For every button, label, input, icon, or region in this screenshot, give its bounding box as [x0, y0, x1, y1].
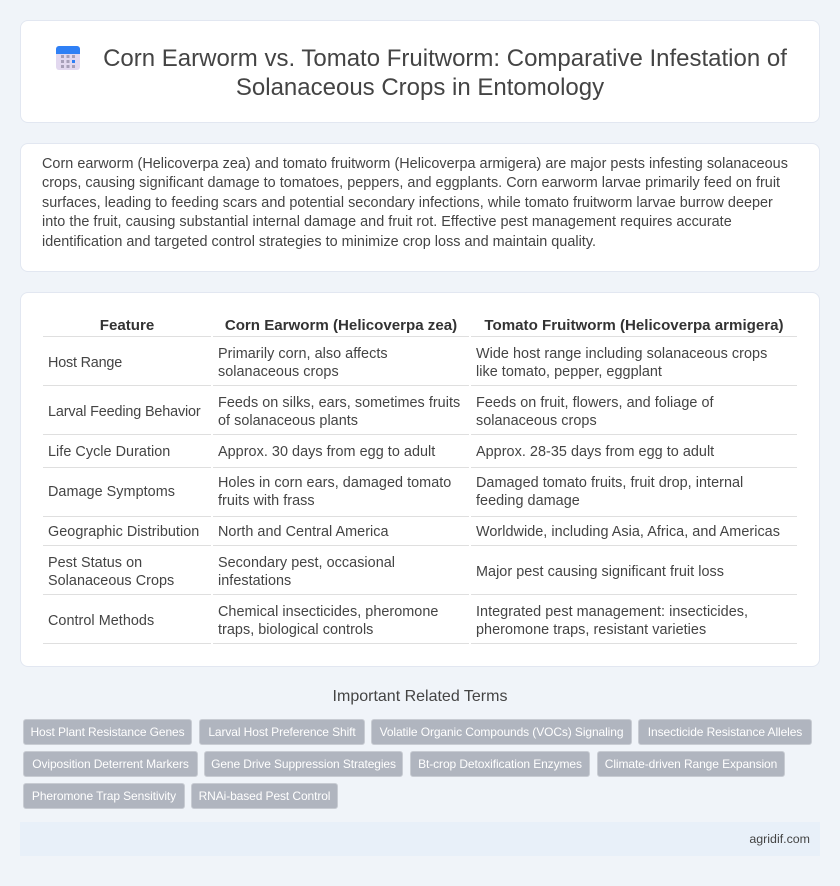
row: control methods: pheromone traps, resistant varieties	[476, 622, 706, 638]
description text: surfaces, leading to feeding scars and potential secondary infections, while tomato fruitworm larvae burrow deeper	[42, 194, 773, 210]
row: larval feeding behavior: Larval Feeding Behavior	[48, 404, 201, 420]
heading: related terms: Important Related Terms	[333, 688, 507, 705]
row: larval feeding behavior: solanaceous crops	[476, 413, 597, 429]
related terms tags: Gene Drive Suppression Strategies	[211, 757, 396, 771]
description text: identification and targeted control strategies to minimize crop loss and maintain quality.	[42, 234, 596, 250]
description text	[42, 156, 788, 250]
table header: Feature	[100, 317, 154, 334]
title: Corn Earworm vs. Tomato Fruitworm: Comparative Infestation of	[103, 45, 787, 72]
row: host range: Host Range	[48, 355, 122, 371]
row: geographic distribution	[48, 524, 780, 540]
row: host range	[48, 346, 767, 380]
row: damage symptoms: Damage Symptoms	[48, 484, 175, 500]
row: control methods: Integrated pest management: insecticides,	[476, 604, 748, 620]
panel: header	[20, 20, 820, 123]
related terms tags	[23, 719, 812, 809]
row: life cycle duration: Approx. 28-35 days from egg to adult	[476, 444, 714, 460]
row: pest status	[48, 555, 724, 589]
row: damage symptoms: feeding damage	[476, 493, 580, 509]
row: life cycle duration: Approx. 30 days from egg to adult	[218, 444, 435, 460]
row: larval feeding behavior	[48, 395, 714, 429]
row: control methods: traps, biological controls	[218, 622, 373, 638]
panel: description	[20, 143, 820, 272]
row: host range: Wide host range including solanaceous crops	[476, 346, 767, 362]
row: geographic distribution: Geographic Distribution	[48, 524, 199, 540]
row: control methods	[48, 604, 748, 638]
row: host range: Primarily corn, also affects	[218, 346, 388, 362]
related terms tags: Volatile Organic Compounds (VOCs) Signaling	[380, 725, 623, 739]
title	[103, 45, 787, 101]
row: life cycle duration	[48, 444, 714, 460]
related terms tags: RNAi-based Pest Control	[199, 789, 330, 803]
row: damage symptoms: fruits with frass	[218, 493, 315, 509]
footer	[20, 822, 820, 856]
row: damage symptoms: Holes in corn ears, damaged tomato	[218, 475, 451, 491]
row: damage symptoms: Damaged tomato fruits, fruit drop, internal	[476, 475, 743, 491]
row: larval feeding behavior: Feeds on silks, ears, sometimes fruits	[218, 395, 460, 411]
related terms tags: Oviposition Deterrent Markers	[32, 757, 189, 771]
title: Solanaceous Crops in Entomology	[236, 74, 604, 101]
row: larval feeding behavior: Feeds on fruit, flowers, and foliage of	[476, 395, 714, 411]
icon: calendar	[56, 46, 80, 70]
row: larval feeding behavior: of solanaceous plants	[218, 413, 358, 429]
row: host range: like tomato, pepper, eggplant	[476, 364, 662, 380]
row: pest status: Secondary pest, occasional	[218, 555, 395, 571]
row: geographic distribution: North and Central America	[218, 524, 389, 540]
row: pest status: infestations	[218, 573, 291, 589]
table header	[100, 317, 784, 334]
footer: agridif.com	[749, 832, 810, 846]
related terms tags: Insecticide Resistance Alleles	[648, 725, 802, 739]
row: life cycle duration: Life Cycle Duration	[48, 444, 170, 460]
row: damage symptoms	[48, 475, 743, 509]
description text: into the fruit, causing substantial internal damage and fruit rot. Effective pest management requires accurate	[42, 214, 732, 230]
panel: comparison table	[20, 292, 820, 667]
description text: crops, causing significant damage to tomatoes, peppers, and eggplants. Corn earworm larvae primarily feed on fruit	[42, 175, 780, 191]
table header: Corn Earworm (Helicoverpa zea)	[225, 317, 457, 334]
description text: Corn earworm (Helicoverpa zea) and tomato fruitworm (Helicoverpa armigera) are major pests infesting solanaceous	[42, 156, 788, 172]
table header: Tomato Fruitworm (Helicoverpa armigera)	[484, 317, 784, 334]
related terms tags: Climate-driven Range Expansion	[605, 757, 777, 771]
row: host range: solanaceous crops	[218, 364, 339, 380]
related terms tags: Bt-crop Detoxification Enzymes	[418, 757, 582, 771]
row: control methods: Chemical insecticides, pheromone	[218, 604, 438, 620]
row: pest status: Pest Status on	[48, 555, 142, 571]
related terms tags: Larval Host Preference Shift	[208, 725, 356, 739]
related terms tags: Pheromone Trap Sensitivity	[32, 789, 176, 803]
row: pest status: Solanaceous Crops	[48, 573, 174, 589]
related terms tags: Host Plant Resistance Genes	[30, 725, 185, 739]
row: control methods: Control Methods	[48, 613, 154, 629]
row: geographic distribution: Worldwide, including Asia, Africa, and Americas	[476, 524, 780, 540]
row: pest status: Major pest causing significant fruit loss	[476, 564, 724, 580]
